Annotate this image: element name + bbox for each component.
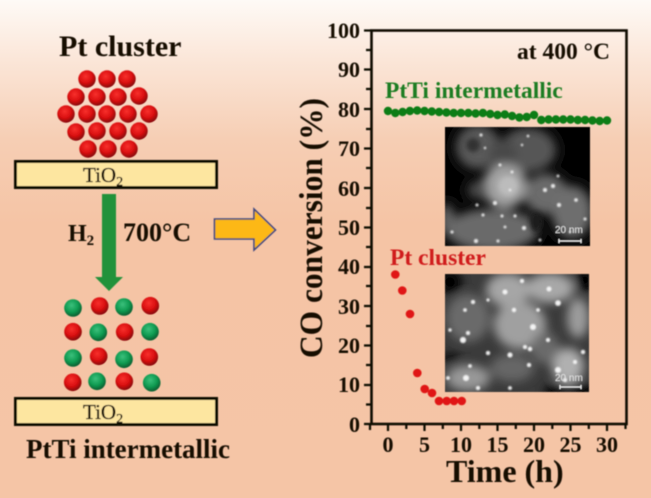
y axis title: CO conversion (%) [294,98,330,358]
y axis tick labels: 40 [338,254,360,279]
x axis tick labels: 5 [419,432,430,457]
icon: PtTi intermetallic atoms [64,297,161,392]
y axis tick labels: 10 [338,372,360,397]
label: PtTi intermetallic series: PtTi intermetallic [385,78,563,104]
heading: Pt cluster: Pt cluster [59,30,181,63]
TiO2 support, bottom [16,398,216,427]
arrow: H2 700C process step [95,194,123,291]
y axis tick labels: 0 [349,412,360,437]
x axis tick labels: 20 [523,432,545,457]
TiO2 support, top: 2 [116,175,123,190]
heading: PtTi intermetallic: PtTi intermetallic [26,434,230,464]
x axis title: Time (h) [446,453,564,489]
x axis tick labels: 10 [450,432,472,457]
y axis tick labels: 20 [338,333,360,358]
icon: Pt atom cluster [57,70,158,158]
y axis tick labels: 60 [338,176,360,201]
data series: PtTi intermetallic [384,106,611,125]
TiO2 support, bottom: 2 [116,412,123,427]
scale bar label: 20 nm [555,225,583,236]
label: H2: H [68,221,87,247]
TiO2 support, top [16,162,216,190]
y axis tick labels: 50 [338,215,360,240]
inset micrograph: PtTi intermetallic [440,125,592,251]
arrow: yellow pointing to chart [214,209,276,250]
line chart frame and axes [364,30,626,431]
x axis tick labels: 0 [382,432,394,457]
y axis tick labels: 80 [338,97,360,122]
inset micrograph: Pt cluster [444,273,590,393]
label: at 400 C: at 400 °C [517,39,610,65]
y axis tick labels [327,18,360,437]
x axis tick labels: 30 [596,432,618,457]
x axis tick labels: 25 [560,432,582,457]
y axis tick labels: 70 [338,136,360,161]
y axis tick labels: 30 [338,294,360,319]
label: 700 C: 700°C [123,218,191,247]
x axis tick labels: 15 [486,432,508,457]
TiO2 support, top: TiO [83,163,116,187]
scale bar label: 20 nm [555,373,583,384]
y axis tick labels: 90 [338,57,360,82]
data series: Pt cluster [391,270,466,405]
TiO2 support, bottom: TiO [83,400,116,424]
label: H2: 2 [87,233,94,249]
x axis tick labels [382,432,618,457]
label: Pt cluster series: Pt cluster [390,245,486,271]
y axis tick labels: 100 [327,18,360,43]
